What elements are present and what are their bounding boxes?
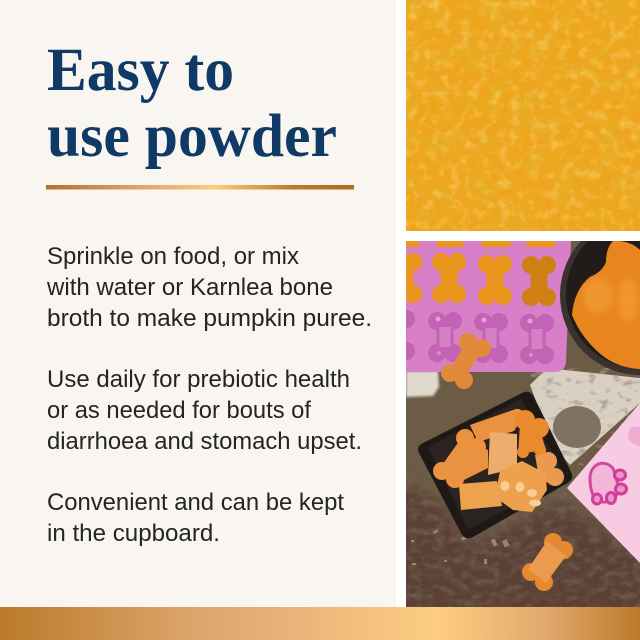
photo: pumpkin treats and silicone moulds: [406, 241, 640, 607]
text block: daily use: diarrhoea and stomach upset.: [47, 428, 362, 455]
text block: storage: [47, 489, 344, 547]
table surface: [396, 241, 640, 620]
title: [47, 37, 337, 170]
empty bone cavities, lower row: [406, 310, 415, 360]
black dish: [418, 392, 572, 538]
text block: daily use: or as needed for bouts of: [47, 397, 311, 424]
text block: how to use: broth to make pumpkin puree.: [47, 305, 372, 332]
gold divider rule: [46, 185, 354, 190]
block treat: [459, 481, 502, 510]
text block: daily use: [47, 366, 362, 455]
text block: daily use: Use daily for prebiotic health: [47, 366, 350, 393]
cube treat: [488, 432, 517, 475]
bone treat, right of dish: [515, 410, 549, 458]
orange filled bones, top row: [406, 241, 556, 306]
pink paw mould: [567, 403, 640, 563]
title: Easy to: [47, 37, 234, 104]
paw-shaped treat: [495, 461, 547, 512]
title: use powder: [47, 103, 337, 170]
text block: storage: in the cupboard.: [47, 520, 220, 547]
worn white plank: [530, 368, 640, 465]
text block: storage: Convenient and can be kept: [47, 489, 344, 516]
gold footer band: [0, 607, 640, 640]
bone treat on tray edge: [441, 333, 491, 389]
bone treat behind paw: [535, 452, 564, 486]
bone treat, left of dish: [433, 429, 488, 488]
paw print cavity: [590, 463, 626, 504]
lone bone treat on table: [522, 533, 573, 591]
text block: how to use: Sprinkle on food, or mix: [47, 243, 299, 270]
pink bone mould tray: [406, 241, 571, 372]
treats in dish: [433, 409, 564, 512]
text block: how to use: with water or Karnlea bone: [46, 274, 333, 301]
text block: how to use: [46, 243, 372, 332]
panel: text background: [0, 0, 396, 607]
bone treat, top of dish: [470, 409, 522, 442]
photo: turmeric pumpkin powder: [406, 0, 640, 231]
bowl of pumpkin puree: [560, 241, 640, 375]
